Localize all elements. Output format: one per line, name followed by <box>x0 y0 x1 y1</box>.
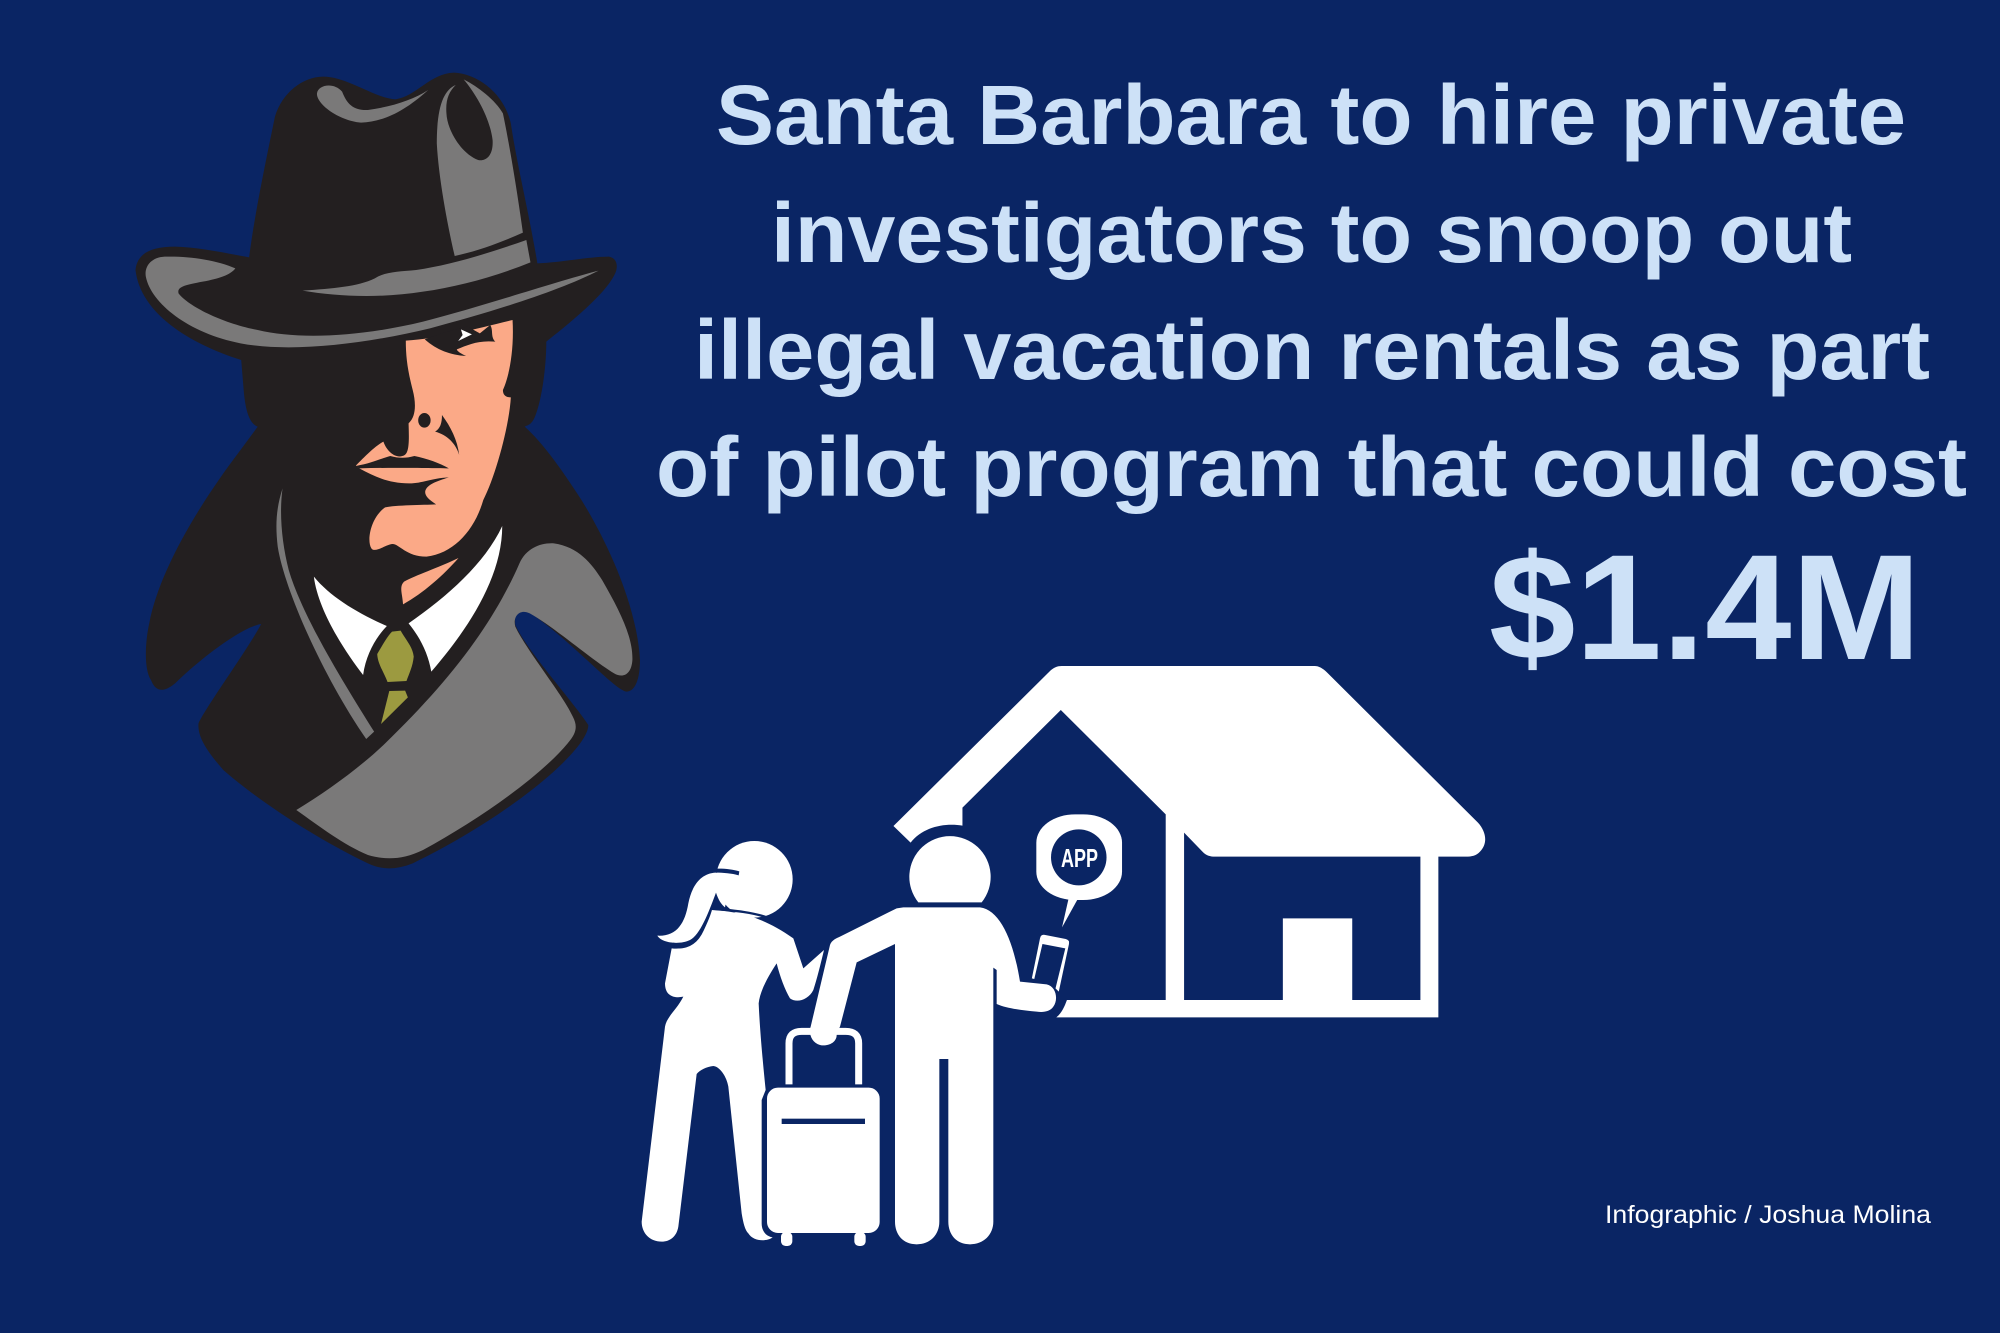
woman neck gap <box>713 909 767 917</box>
headline line 3: illegal vacation rentals as part <box>694 303 1930 397</box>
tie knot <box>377 631 414 682</box>
woman ponytail <box>657 873 730 943</box>
speech bubble tail <box>1062 899 1078 927</box>
hat crown dent <box>317 85 428 123</box>
man body <box>810 907 1056 1244</box>
man head <box>909 836 991 902</box>
icon: travellers with suitcase <box>642 836 1056 1246</box>
headline line 4: of pilot program that could cost <box>656 420 1967 514</box>
hat crown side <box>437 79 523 256</box>
headline line 1: Santa Barbara to hire private <box>716 68 1906 162</box>
woman ponytail gap <box>672 897 714 947</box>
bubble inner circle <box>1051 829 1107 885</box>
right collar <box>409 526 502 672</box>
app speech bubble <box>1036 814 1122 900</box>
cheek line <box>435 415 459 455</box>
suitcase body <box>765 1086 881 1235</box>
suitcase right wheel <box>854 1232 866 1246</box>
woman body <box>642 910 824 1242</box>
woman hair band <box>716 869 739 875</box>
left collar <box>314 577 387 675</box>
nostril <box>418 413 431 428</box>
hat band <box>303 240 530 296</box>
suitcase handle <box>789 1031 859 1090</box>
woman head <box>716 841 793 918</box>
credit: Infographic / Joshua Molina <box>1605 1201 1931 1229</box>
eye highlight <box>458 329 472 341</box>
app label: APP <box>1061 843 1098 873</box>
face <box>356 320 513 557</box>
house roof and frame <box>893 666 1485 1017</box>
lapel line <box>276 488 374 739</box>
headline <box>656 68 1967 514</box>
icon: house <box>893 666 1485 1017</box>
mouth <box>356 456 449 468</box>
suitcase left wheel <box>781 1232 792 1246</box>
illustration: detective <box>135 73 640 868</box>
suitcase strap <box>782 1119 865 1124</box>
detective black silhouette <box>135 73 640 868</box>
phone <box>1032 935 1069 992</box>
house interior and door <box>1184 833 1420 1000</box>
eye <box>425 325 495 356</box>
hat brim highlight <box>146 257 599 347</box>
grey coat panel <box>296 543 632 858</box>
headline line 2: investigators to snoop out <box>771 186 1852 280</box>
neck <box>401 558 458 604</box>
cost figure: $1.4M <box>1489 523 1921 691</box>
tie tail <box>381 691 408 724</box>
